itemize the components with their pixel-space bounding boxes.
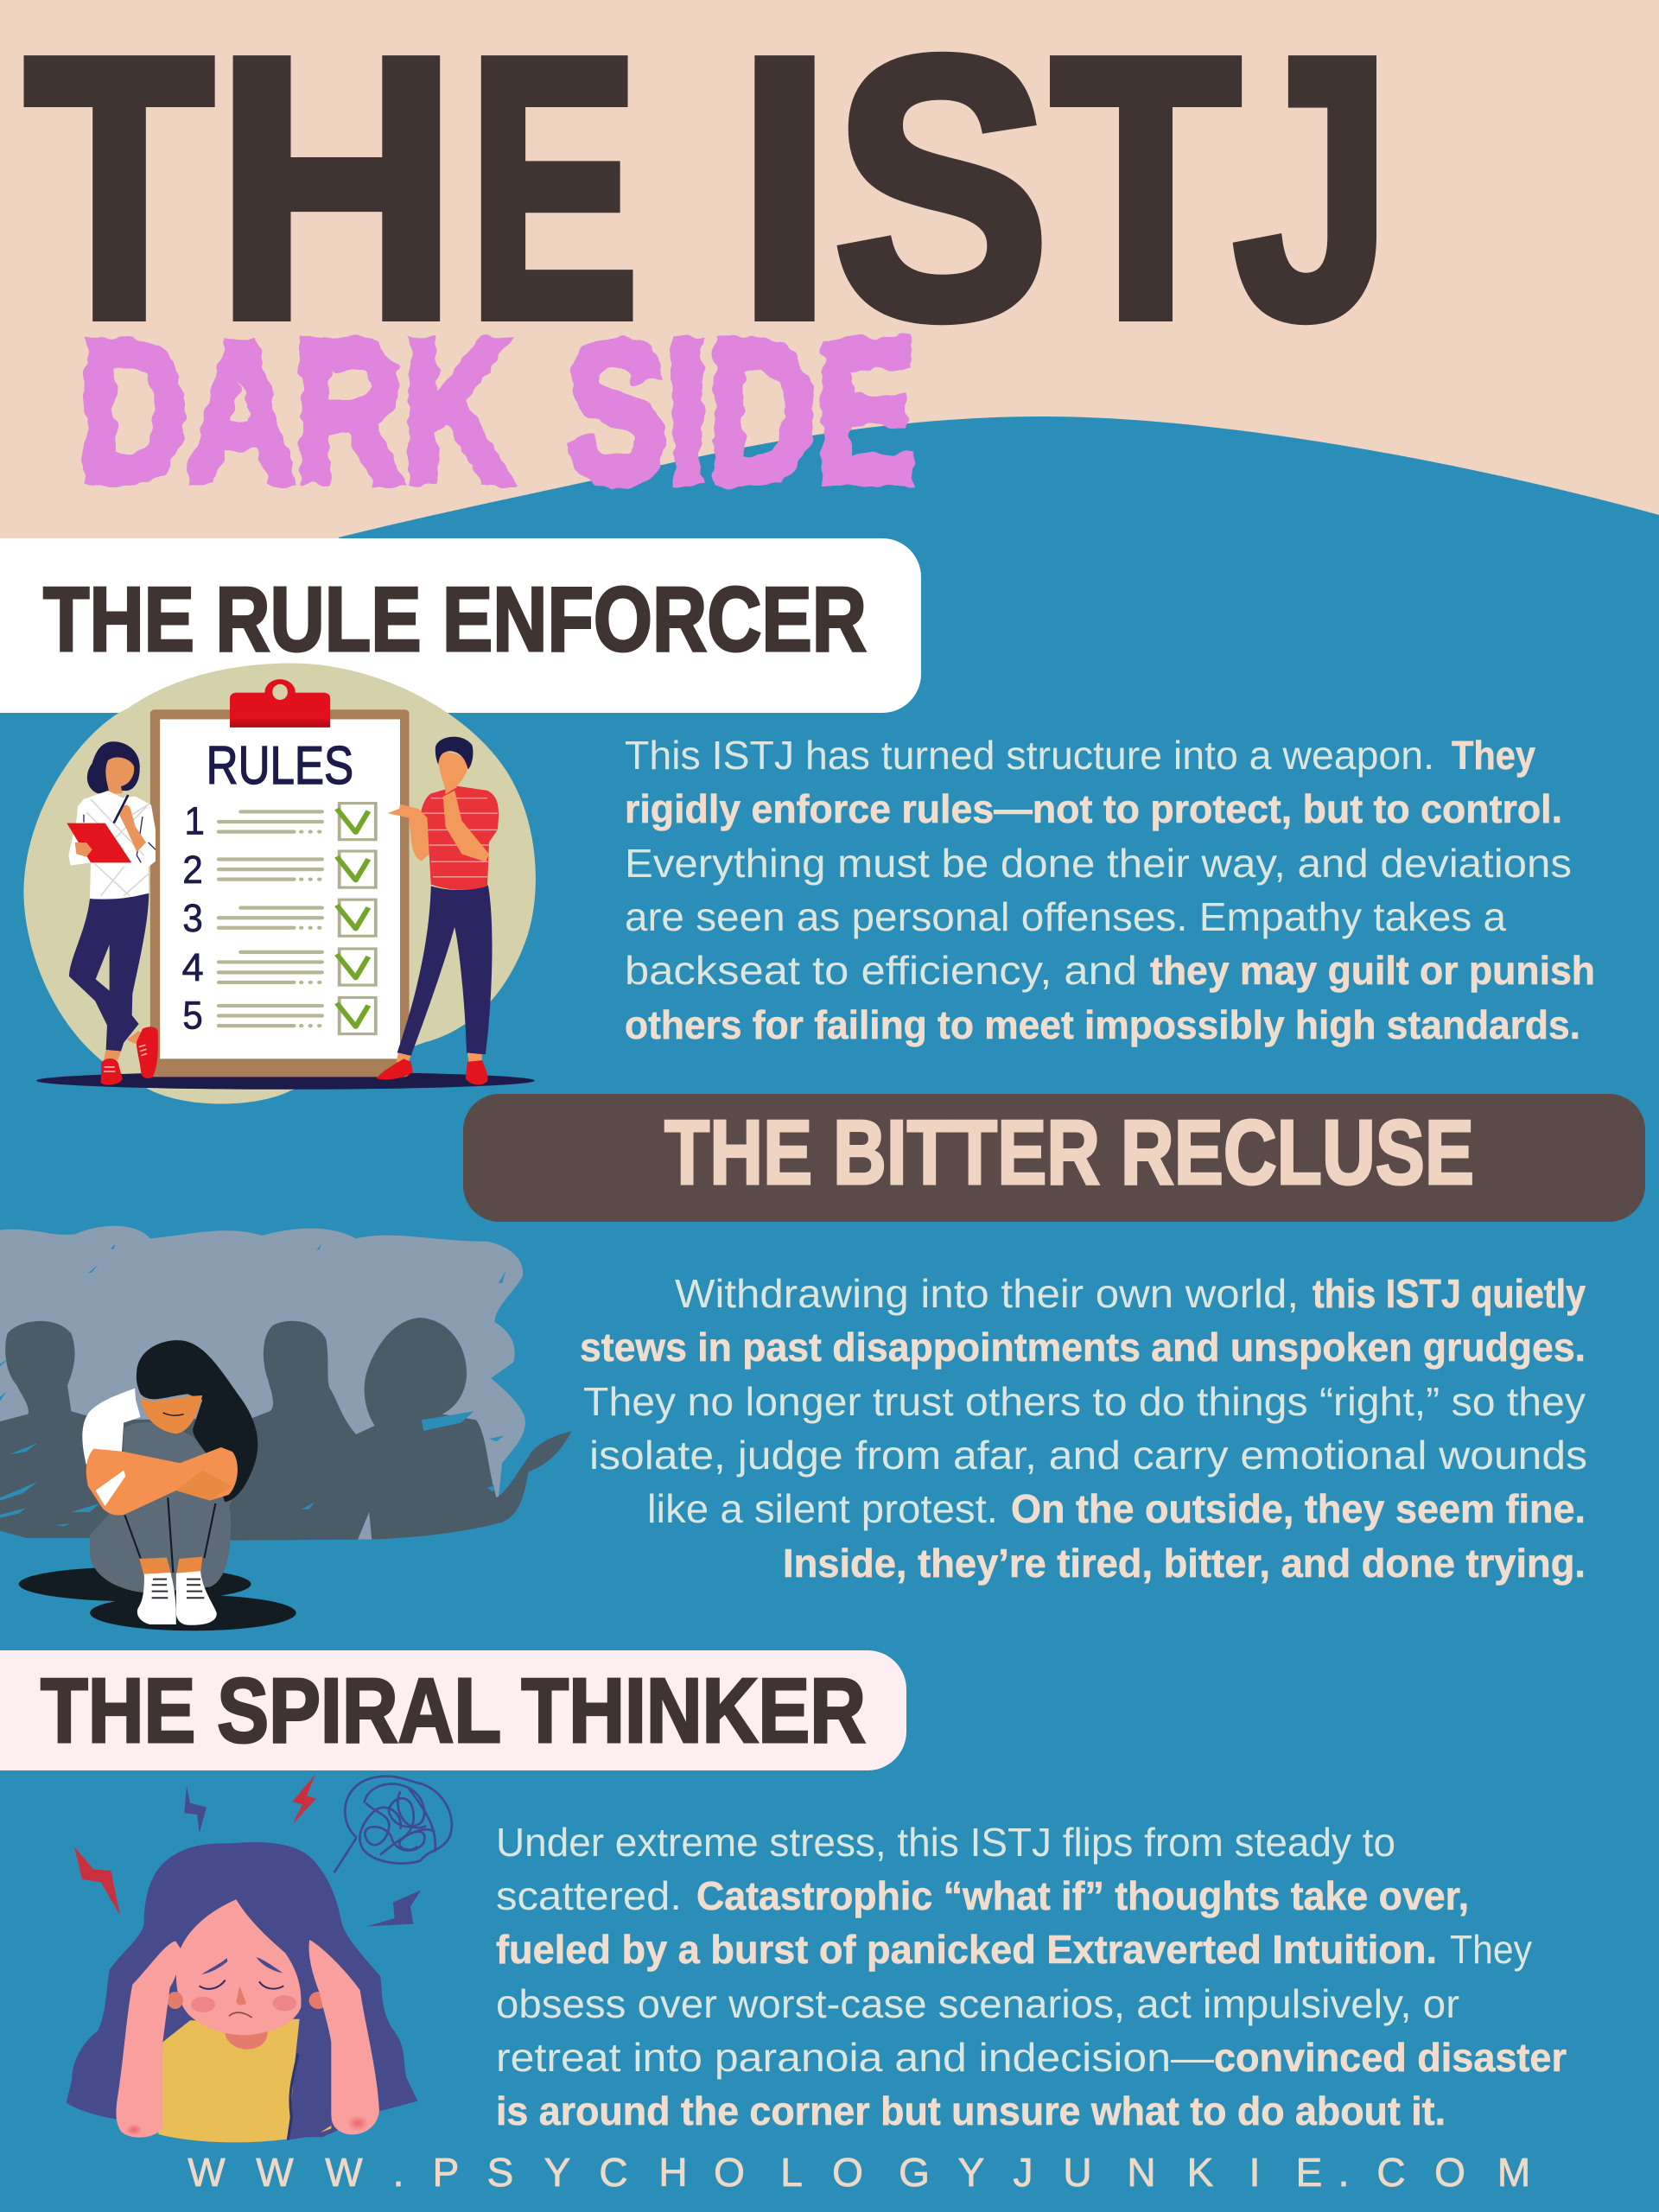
background: peach header (0, 0, 1659, 553)
text block: rule enforcer description (625, 733, 1595, 1047)
text block: bitter recluse description: They no longer trust others to do things “right,” so they (583, 1379, 1586, 1424)
text block: bitter recluse description: like a silent protest. (647, 1486, 998, 1531)
text block: rule enforcer description: backseat to efficiency, and (625, 948, 1137, 993)
text block: spiral thinker description: obsess over worst-case scenarios, act impulsively, or (496, 1981, 1459, 2026)
panel: the spiral thinker heading bar (0, 1650, 906, 1770)
text block: spiral thinker description: scattered. (496, 1873, 682, 1918)
illustration: rules clipboard with two people: RULES (207, 736, 353, 796)
text block: rule enforcer description: This ISTJ has turned structure into a weapon. (625, 733, 1434, 778)
man figure (377, 737, 499, 1084)
subtitle: dark side: DARK (79, 300, 510, 524)
icon: tangled thought scribble (334, 1777, 452, 1872)
text block: rule enforcer description: Everything must be done their way, and deviations (625, 841, 1572, 886)
text block: bitter recluse description: stews in past disappointments and unspoken grudges. (580, 1325, 1586, 1370)
subtitle: dark side: SIDE (567, 300, 916, 524)
text block: rule enforcer description: they may guilt or punish (1150, 948, 1595, 993)
text block: bitter recluse description (580, 1271, 1587, 1586)
text block: spiral thinker description: retreat into paranoia and indecision— (496, 2035, 1214, 2080)
text block: bitter recluse description: isolate, judge from afar, and carry emotional wounds (589, 1433, 1587, 1478)
text block: spiral thinker description: Under extreme stress, this ISTJ flips from steady to (496, 1820, 1395, 1865)
text block: spiral thinker description: fueled by a burst of panicked Extraverted Intuition. (496, 1927, 1437, 1972)
panel: the rule enforcer heading bar (0, 538, 921, 713)
text block: rule enforcer description: They (1452, 733, 1535, 778)
text block: rule enforcer description: others for failing to meet impossibly high standards. (625, 1002, 1580, 1047)
text block: bitter recluse description: On the outside, they seem fine. (1011, 1486, 1586, 1531)
text block: spiral thinker description (496, 1820, 1567, 2133)
icon: lightning bolts (74, 1774, 421, 1926)
illustration: rules clipboard with two people: 3 (182, 895, 203, 940)
illustration: rules clipboard with two people: 2 (182, 847, 203, 892)
illustration: rules clipboard with two people: 1 (184, 798, 205, 843)
text block: rule enforcer description: rigidly enforce rules—not to protect, but to control. (625, 786, 1562, 831)
illustration: rules clipboard with two people: 5 (182, 993, 203, 1037)
heading: the spiral thinker: THE SPIRAL THINKER (41, 1660, 866, 1762)
text block: bitter recluse description: Inside, they’re tired, bitter, and done trying. (783, 1541, 1586, 1586)
panel: the bitter recluse heading bar (463, 1094, 1645, 1222)
woman figure (67, 741, 158, 1085)
text block: spiral thinker description: convinced disaster (1214, 2035, 1567, 2080)
illustration: stressed woman holding head (67, 1774, 452, 2142)
illustration: rules clipboard with two people: 4 (181, 944, 204, 989)
illustration: person hugging knees with shadow figures (0, 1226, 571, 1630)
footer url: WWW.PSYCHOLOGYJUNKIE.COM (188, 2150, 1530, 2195)
text block: bitter recluse description: this ISTJ quietly (1313, 1271, 1586, 1316)
text block: bitter recluse description: Withdrawing into their own world, (675, 1271, 1299, 1316)
illustration: rules clipboard with two people (23, 664, 536, 1104)
text block: spiral thinker description: is around the corner but unsure what to do about it. (496, 2088, 1446, 2133)
heading: the rule enforcer: THE RULE ENFORCER (43, 569, 867, 671)
text block: spiral thinker description: Catastrophic “what if” thoughts take over, (696, 1873, 1469, 1918)
text block: spiral thinker description: They (1450, 1927, 1532, 1972)
text block: rule enforcer description: are seen as personal offenses. Empathy takes a (625, 894, 1506, 939)
heading: the bitter recluse: THE BITTER RECLUSE (664, 1102, 1474, 1204)
